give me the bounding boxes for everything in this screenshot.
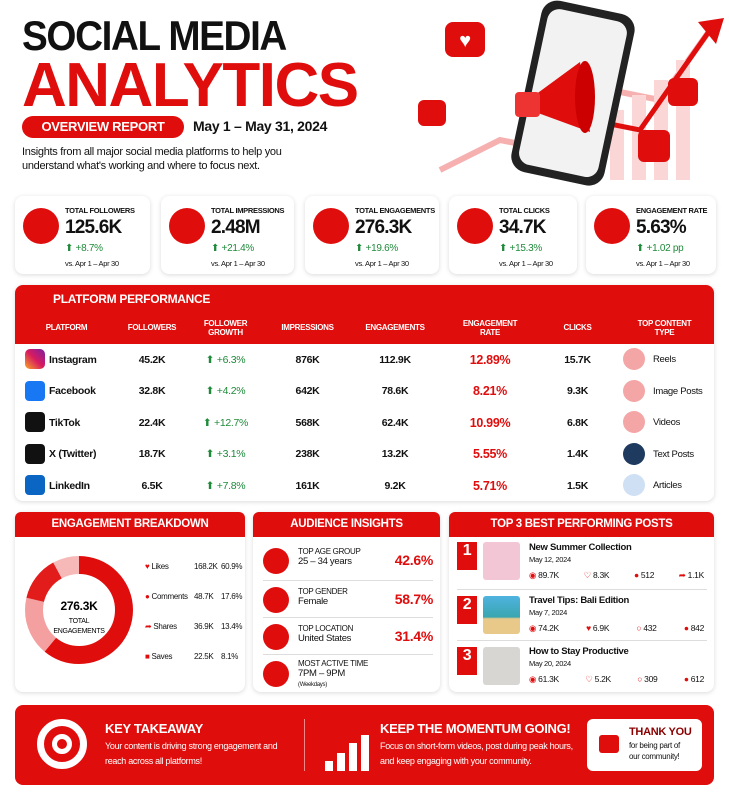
kpi: clicks: TOTAL CLICKS bbox=[499, 206, 550, 215]
donut chart: ENGAGEMENTS bbox=[53, 628, 105, 635]
table: 32.8K bbox=[139, 385, 165, 397]
table bbox=[15, 311, 714, 493]
subtitle pill bbox=[22, 116, 184, 138]
panel: audience insights bbox=[253, 512, 440, 692]
panel: audience insights: Female bbox=[298, 596, 328, 607]
table: Videos bbox=[653, 417, 680, 428]
subtitle pill: OVERVIEW REPORT bbox=[41, 119, 165, 134]
kpi: engagements: ⬆ +19.6% bbox=[355, 243, 398, 254]
panel: top posts: TOP 3 BEST PERFORMING POSTS bbox=[491, 518, 672, 530]
kpi: followers bbox=[15, 196, 150, 274]
kpi: engagements: vs. Apr 1 – Apr 30 bbox=[355, 259, 409, 268]
panel: platform performance bbox=[15, 285, 714, 501]
legend: 36.9K bbox=[194, 622, 213, 631]
kpi: impressions: ⬆ +21.4% bbox=[211, 243, 254, 254]
keep momentum: KEEP THE MOMENTUM GOING! bbox=[380, 721, 570, 736]
table: ⬆ +3.1% bbox=[206, 448, 245, 460]
table: 6.8K bbox=[567, 417, 588, 429]
table: Facebook bbox=[49, 385, 96, 397]
legend: ● Comments bbox=[145, 592, 188, 601]
panel: top posts: ➦ 1.1K bbox=[679, 570, 704, 580]
panel: top posts: ○ 432 bbox=[636, 623, 657, 633]
table: 22.4K bbox=[139, 417, 165, 429]
table: 45.2K bbox=[139, 354, 165, 366]
table: ⬆ +4.2% bbox=[206, 385, 245, 397]
panel: top posts: May 7, 2024 bbox=[529, 608, 567, 617]
table: ⬆ +7.8% bbox=[206, 480, 245, 492]
panel: top posts: May 20, 2024 bbox=[529, 659, 571, 668]
panel: top posts: 2 bbox=[463, 596, 471, 613]
legend bbox=[145, 562, 242, 661]
panel: audience insights: AUDIENCE INSIGHTS bbox=[290, 518, 403, 530]
table: 1.4K bbox=[567, 448, 588, 460]
panel: top posts: 3 bbox=[463, 647, 471, 664]
panel: top posts: ♡ 8.3K bbox=[584, 570, 609, 580]
kpi: followers: 125.6K bbox=[65, 217, 121, 238]
title bbox=[22, 12, 358, 120]
panel: audience insights: TOP GENDER bbox=[298, 587, 348, 596]
panel: audience insights: (Weekdays) bbox=[298, 682, 327, 688]
table: X (Twitter) bbox=[49, 448, 96, 460]
kpi: engagement rate: vs. Apr 1 – Apr 30 bbox=[636, 259, 690, 268]
legend: 8.1% bbox=[221, 652, 238, 661]
key takeaway bbox=[105, 721, 278, 766]
kpi: clicks: ⬆ +15.3% bbox=[499, 243, 542, 254]
panel: top posts: ● 842 bbox=[684, 623, 704, 633]
table: ⬆ +6.3% bbox=[206, 354, 245, 366]
panel: audience insights: TOP LOCATION bbox=[298, 624, 353, 633]
thank you card: THANK YOU bbox=[629, 726, 692, 738]
legend: 60.9% bbox=[221, 562, 242, 571]
panel: audience insights: United States bbox=[298, 633, 351, 644]
kpi: impressions: vs. Apr 1 – Apr 30 bbox=[211, 259, 265, 268]
date range: May 1 – May 31, 2024 bbox=[193, 118, 327, 134]
panel: top posts: ● 512 bbox=[634, 570, 654, 580]
panel: top posts: ◉ 74.2K bbox=[529, 623, 559, 633]
table: 12.89% bbox=[470, 353, 510, 367]
icon: target bbox=[37, 719, 87, 769]
table: ENGAGEMENT bbox=[463, 318, 517, 328]
table: Text Posts bbox=[653, 449, 694, 460]
panel: audience insights: 42.6% bbox=[395, 552, 433, 568]
platform icons bbox=[25, 349, 45, 495]
table: 5.71% bbox=[473, 479, 507, 493]
table: 8.21% bbox=[473, 384, 507, 398]
thank you card: for being part of bbox=[629, 741, 680, 750]
table: TOP CONTENT bbox=[638, 318, 691, 328]
panel: top posts: 1 bbox=[463, 542, 471, 559]
table: 18.7K bbox=[139, 448, 165, 460]
key takeaway: KEY TAKEAWAY bbox=[105, 721, 203, 736]
kpi: clicks: 34.7K bbox=[499, 217, 546, 238]
table: 642K bbox=[296, 385, 319, 397]
heading: PLATFORM PERFORMANCE bbox=[53, 292, 210, 306]
table: ENGAGEMENTS bbox=[365, 323, 425, 332]
table: 161K bbox=[296, 480, 319, 492]
table: Articles bbox=[653, 480, 682, 491]
kpi: engagements: TOTAL ENGAGEMENTS bbox=[355, 206, 435, 215]
hero illustration: ♥ bbox=[459, 30, 471, 52]
table: Instagram bbox=[49, 354, 96, 366]
kpi: impressions: TOTAL IMPRESSIONS bbox=[211, 206, 284, 215]
table: FOLLOWER bbox=[204, 318, 247, 328]
kpi: engagement rate: 5.63% bbox=[636, 217, 686, 238]
donut chart bbox=[25, 556, 133, 664]
table: 9.2K bbox=[384, 480, 405, 492]
legend: 17.6% bbox=[221, 592, 242, 601]
keep momentum bbox=[380, 721, 573, 766]
panel: top posts: New Summer Collection bbox=[529, 542, 631, 553]
table: 6.5K bbox=[142, 480, 162, 492]
table: ⬆ +12.7% bbox=[203, 417, 248, 429]
kpi: clicks: vs. Apr 1 – Apr 30 bbox=[499, 259, 553, 268]
kpi: engagement rate bbox=[586, 196, 716, 274]
legend: 22.5K bbox=[194, 652, 213, 661]
panel: top posts: ♡ 5.2K bbox=[585, 674, 611, 684]
keep momentum: Focus on short-form videos, post during peak hours, and keep engaging with your community. bbox=[380, 741, 573, 766]
panel: audience insights: TOP AGE GROUP bbox=[298, 547, 360, 556]
table: IMPRESSIONS bbox=[281, 323, 334, 332]
table: 9.3K bbox=[567, 385, 588, 397]
hero illustration bbox=[418, 0, 724, 186]
kpi: followers: ⬆ +8.7% bbox=[65, 243, 103, 254]
kpi: followers: vs. Apr 1 – Apr 30 bbox=[65, 259, 119, 268]
title: ANALYTICS bbox=[22, 51, 358, 120]
thank you card: our community! bbox=[629, 752, 679, 761]
legend: ➦ Shares bbox=[145, 622, 177, 631]
table: FOLLOWERS bbox=[128, 323, 176, 332]
table: 5.55% bbox=[473, 447, 507, 461]
panel: top posts bbox=[449, 512, 714, 692]
panel: top posts: ● 612 bbox=[684, 674, 704, 684]
panel: audience insights: MOST ACTIVE TIME bbox=[298, 659, 368, 668]
legend: ■ Saves bbox=[145, 652, 172, 661]
table: 112.9K bbox=[379, 354, 411, 366]
kpi: followers: TOTAL FOLLOWERS bbox=[65, 206, 135, 215]
table: TikTok bbox=[49, 417, 80, 429]
legend: 168.2K bbox=[194, 562, 218, 571]
table: TYPE bbox=[655, 328, 674, 336]
panel: top posts: How to Stay Productive bbox=[529, 646, 629, 657]
table: CLICKS bbox=[564, 323, 591, 332]
table: 876K bbox=[296, 354, 319, 366]
thank you card bbox=[587, 719, 702, 771]
table: LinkedIn bbox=[49, 480, 90, 492]
table: 238K bbox=[296, 448, 319, 460]
panel: audience insights: 7PM – 9PM bbox=[298, 668, 345, 679]
panel: top posts: ○ 309 bbox=[637, 674, 657, 684]
table: 13.2K bbox=[382, 448, 408, 460]
table: PLATFORM bbox=[46, 323, 87, 332]
panel: audience insights: 25 – 34 years bbox=[298, 556, 352, 567]
kpi: clicks bbox=[449, 196, 577, 274]
table: Image Posts bbox=[653, 386, 703, 397]
footer banner bbox=[15, 705, 714, 785]
panel: audience insights: 58.7% bbox=[395, 591, 433, 607]
panel: top posts: ♥ 6.9K bbox=[586, 623, 609, 633]
panel: audience insights: 31.4% bbox=[395, 628, 433, 644]
panel: top posts: Travel Tips: Bali Edition bbox=[529, 595, 629, 606]
table: GROWTH bbox=[208, 328, 243, 336]
content type icons bbox=[623, 348, 645, 496]
table: 1.5K bbox=[567, 480, 588, 492]
kpi: impressions bbox=[161, 196, 294, 274]
donut chart: TOTAL bbox=[69, 618, 90, 625]
table: 62.4K bbox=[382, 417, 408, 429]
kpi: engagements bbox=[305, 196, 439, 274]
kpi: engagements: 276.3K bbox=[355, 217, 411, 238]
kpi: impressions: 2.48M bbox=[211, 217, 260, 238]
heading bbox=[15, 285, 714, 311]
description: Insights from all major social media platforms to help you understand what's working and where to focus next. bbox=[22, 146, 282, 172]
panel: engagement breakdown: ENGAGEMENT BREAKDOWN bbox=[52, 518, 208, 530]
table: Reels bbox=[653, 354, 676, 365]
panel: top posts: ◉ 61.3K bbox=[529, 674, 559, 684]
legend: 48.7K bbox=[194, 592, 213, 601]
table: 78.6K bbox=[382, 385, 408, 397]
panel: engagement breakdown bbox=[15, 512, 245, 692]
title: SOCIAL MEDIA bbox=[22, 12, 286, 59]
table: RATE bbox=[480, 328, 500, 336]
legend: 13.4% bbox=[221, 622, 242, 631]
table: 15.7K bbox=[564, 354, 591, 366]
kpi: engagement rate: ⬆ +1.02 pp bbox=[636, 243, 683, 254]
kpi: engagement rate: ENGAGEMENT RATE bbox=[636, 206, 707, 215]
table: 568K bbox=[296, 417, 319, 429]
panel: top posts: ◉ 89.7K bbox=[529, 570, 559, 580]
panel: top posts: May 12, 2024 bbox=[529, 555, 571, 564]
legend: ♥ Likes bbox=[145, 562, 169, 571]
key takeaway: Your content is driving strong engagement and reach across all platforms! bbox=[105, 741, 277, 766]
icon: growth chart bbox=[325, 735, 369, 771]
donut chart: 276.3K bbox=[61, 599, 98, 613]
table: 10.99% bbox=[470, 416, 510, 430]
